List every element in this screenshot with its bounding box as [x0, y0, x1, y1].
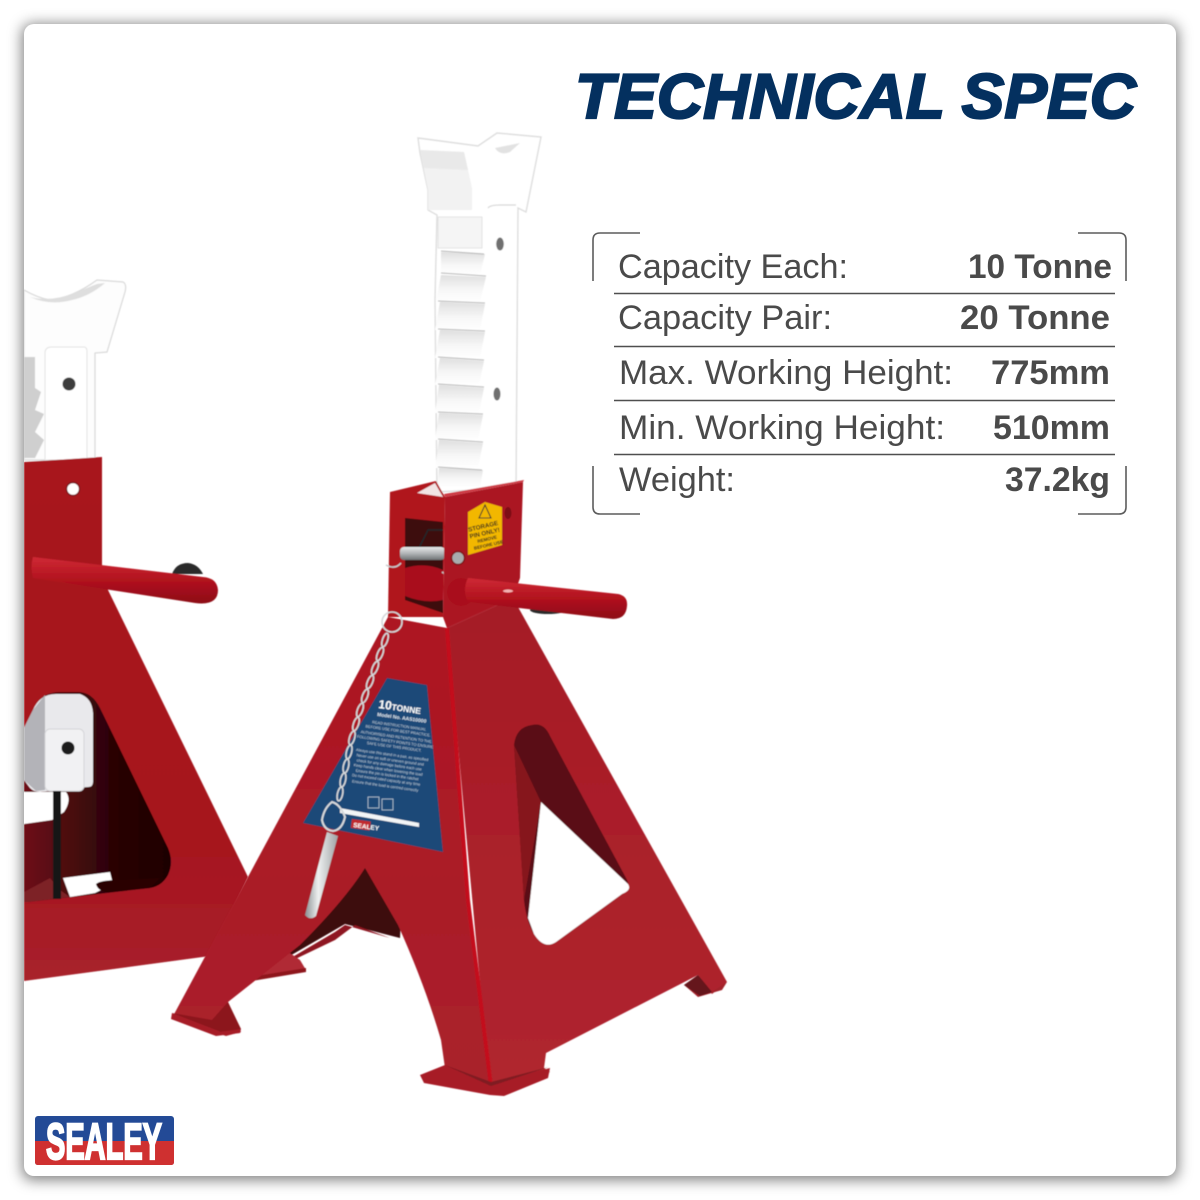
blue hang tag: Always use this stand in a pair, as specified [356, 748, 429, 762]
left stand: red head [24, 457, 248, 981]
row: capacity pair: 20 Tonne [960, 299, 1110, 337]
blue hang tag: check for any damage before each use [356, 758, 422, 772]
background axle stand (cropped left) [24, 280, 248, 981]
ram saddle shading [420, 150, 472, 210]
row: weight [619, 461, 1110, 499]
head hole [504, 507, 512, 519]
rear foot [250, 949, 306, 979]
blue hang tag: SEALEY [353, 822, 380, 833]
head recess [405, 518, 443, 613]
front ridge [447, 628, 491, 1086]
row: max working height: 775mm [991, 354, 1110, 392]
ram right panel edge [488, 205, 516, 208]
blue hang tag: Ensure that the load is centred correctly [352, 779, 419, 793]
right face [447, 598, 727, 1090]
warning label: BEFORE USE [473, 539, 504, 551]
safety chain [336, 612, 402, 801]
warning label: PIN ONLY! [469, 527, 501, 541]
title: TECHNICAL SPEC [575, 62, 1138, 132]
front foot [420, 1065, 550, 1096]
left stand: grip [172, 563, 203, 574]
blue hang tag: FOLLOWING SAFETY POINTS TO ENSURE [357, 735, 434, 749]
row dividers [614, 294, 1115, 454]
row: capacity pair: Capacity Pair: [618, 299, 832, 337]
main axle stand [171, 133, 727, 1096]
left stand: white gap and rear foot [24, 792, 69, 824]
spec table [593, 233, 1126, 514]
warning label [467, 502, 504, 555]
row: capacity each [618, 248, 1112, 286]
blue hang tag: READ INSTRUCTION MANUAL [372, 720, 426, 732]
row: max working height [619, 354, 1110, 392]
blue hang tag: Keep hands clear when lowering the load [353, 763, 423, 777]
handle [447, 578, 627, 619]
blue hang tag: Model No. AAS10000 [377, 712, 427, 725]
warning label: REMOVE [477, 535, 497, 544]
blue hang tag: SAFE USE OF THIS PRODUCT. [367, 741, 422, 753]
row: min working height: Min. Working Height: [619, 409, 945, 447]
blue hang tag: 10TONNE [378, 697, 422, 717]
left stand: window [24, 692, 171, 902]
left stand: handle [32, 557, 218, 603]
left stand: white ram [24, 280, 126, 460]
head front plate [443, 482, 523, 628]
ram teeth [438, 217, 482, 248]
left foot [171, 1002, 241, 1036]
blue hang tag: Ensure the pin is locked in the ratchet [356, 769, 420, 782]
row: weight: 37.2kg [1005, 461, 1110, 499]
warning label: STORAGE [468, 520, 499, 534]
row: max working height: Max. Working Height: [619, 354, 953, 392]
pin head [452, 552, 464, 564]
side window [514, 724, 629, 945]
SEALEY logo [35, 1113, 174, 1170]
white ram [418, 133, 541, 492]
locking pin [305, 802, 345, 918]
row: capacity pair [618, 299, 1110, 337]
blue hang tag [303, 678, 443, 852]
ram holes [496, 238, 504, 250]
head hinge wire [418, 530, 443, 550]
row: capacity each: Capacity Each: [618, 248, 848, 286]
head back [388, 481, 445, 617]
blue hang tag: AUTHORISED AND RETENTION TO THE [360, 730, 432, 744]
right foot [684, 975, 727, 997]
row: min working height [619, 409, 1110, 447]
grip [530, 606, 566, 614]
blue hang tag: Do not exceed rated capacity at any time [352, 773, 420, 787]
rear legs [250, 862, 402, 981]
SEALEY logo: SEALEY [46, 1113, 162, 1170]
blue hang tag: Never use on soft or uneven ground and [356, 753, 424, 767]
head barrel [405, 565, 443, 601]
left stand: black rod [53, 791, 61, 899]
row: min working height: 510mm [993, 409, 1110, 447]
row: weight: Weight: [619, 461, 735, 499]
left leg face [172, 617, 491, 1086]
frame brackets [593, 233, 1126, 514]
head pin [400, 547, 445, 560]
left stand: ram foot plate [24, 694, 93, 792]
row: capacity each: 10 Tonne [968, 248, 1112, 286]
blue hang tag: BEFORE USE FOR BEST PRACTICE. [365, 724, 431, 738]
